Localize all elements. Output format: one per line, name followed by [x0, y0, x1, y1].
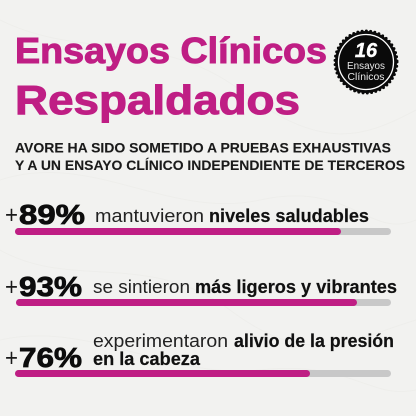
- stat: 76%: experimentaron: [93, 330, 228, 351]
- stat: 93%: [5, 271, 397, 306]
- stat: 89%: niveles saludables: [209, 205, 369, 226]
- stat: 76%: alivio de la presión: [234, 330, 394, 351]
- stat: 89%: mantuvieron: [95, 205, 204, 226]
- badge: 16 Ensayos Clínicos: Ensayos: [347, 61, 385, 72]
- stat: 93%: más ligeros y vibrantes: [195, 276, 397, 297]
- subtitle: [15, 140, 405, 173]
- title: [15, 30, 327, 123]
- stat: 93%: 93%: [19, 271, 82, 302]
- badge: 16 Ensayos Clínicos: 16: [355, 40, 378, 62]
- subtitle: AVORE HA SIDO SOMETIDO A PRUEBAS EXHAUSTIVAS: [15, 140, 391, 156]
- stat: 93%: +: [5, 273, 18, 301]
- stat: 89%: 89%: [19, 199, 85, 230]
- bar: 93%: [16, 299, 391, 306]
- stat: 89%: [5, 199, 391, 235]
- stat: 76%: +: [5, 344, 18, 372]
- stat: 76%: [5, 330, 394, 377]
- subtitle: Y A UN ENSAYO CLÍNICO INDEPENDIENTE DE TERCEROS: [15, 158, 405, 173]
- bar: 76%: [15, 370, 391, 377]
- stat: 76%: 76%: [19, 342, 82, 373]
- stat: 89%: +: [5, 201, 18, 229]
- title: Respaldados: [15, 77, 300, 123]
- badge: 16 Ensayos Clínicos: [335, 31, 397, 93]
- title: Ensayos Clínicos: [15, 30, 327, 71]
- stat: 76%: en la cabeza: [93, 348, 201, 369]
- badge: 16 Ensayos Clínicos: Clínicos: [348, 72, 384, 83]
- stat: 93%: se sintieron: [93, 276, 190, 297]
- bar: 89%: [15, 228, 391, 235]
